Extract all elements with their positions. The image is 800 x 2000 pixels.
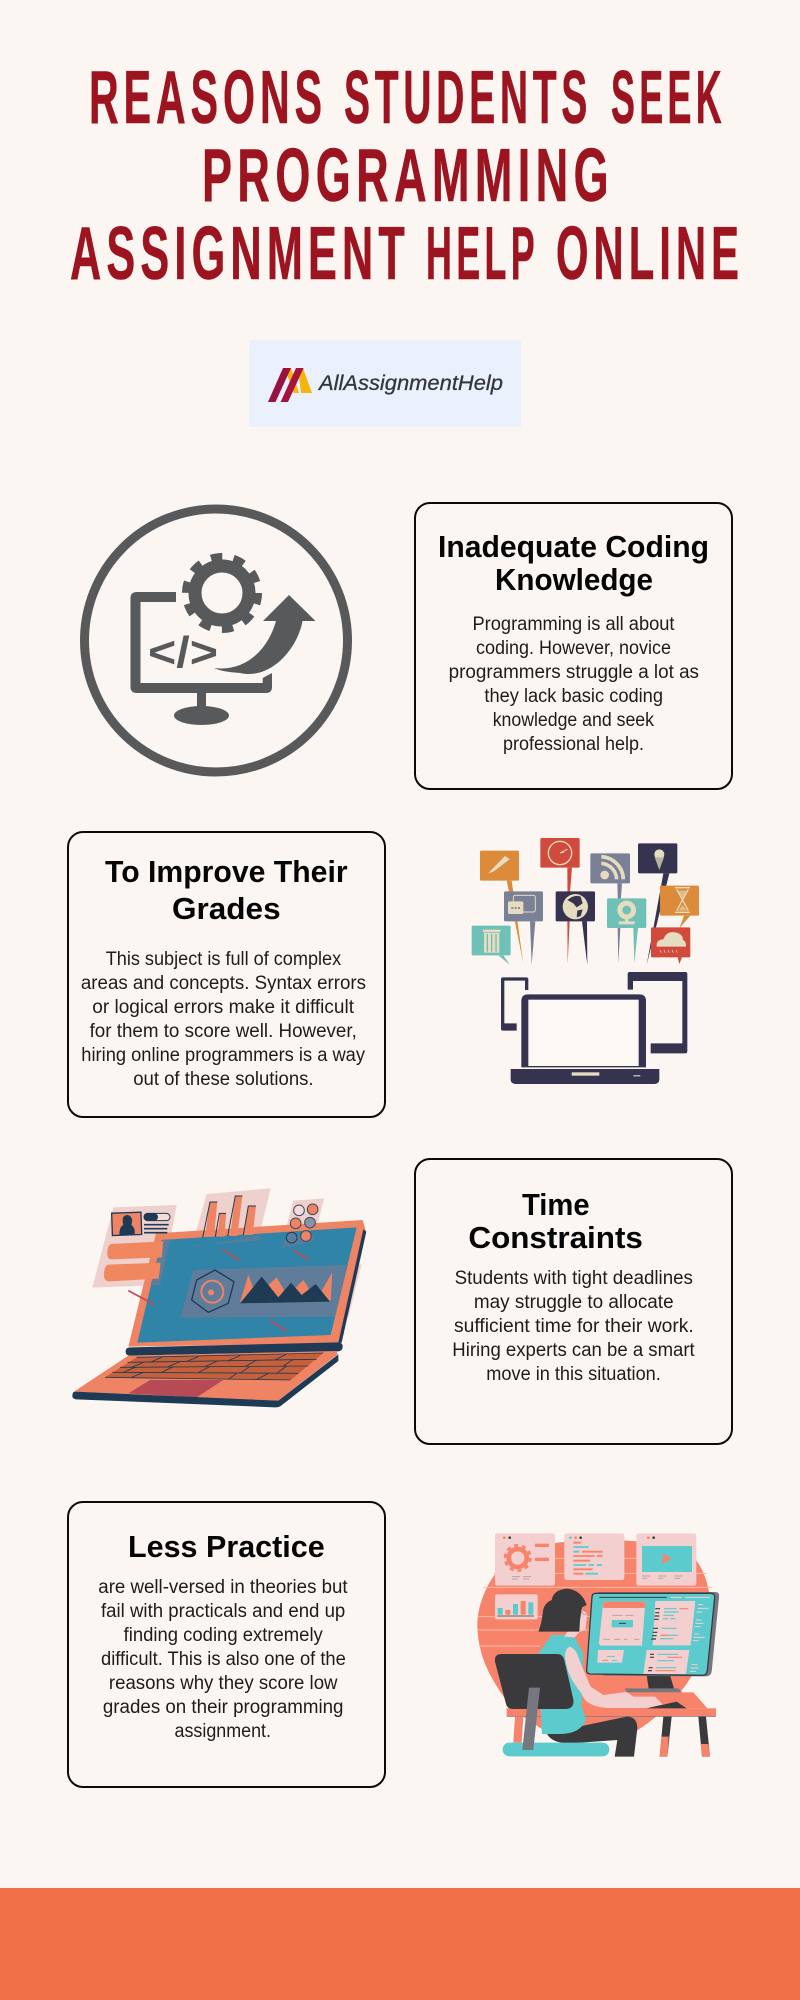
- body text: grades on their programming: [103, 1697, 344, 1718]
- logo: AllAssignmentHelp: [249, 340, 521, 427]
- device: phone: [501, 977, 528, 1031]
- heading: Time: [522, 1187, 590, 1222]
- body text: This subject is full of complex: [106, 949, 342, 970]
- logo: AllAssignmentHelp: AllAssignmentHelp: [317, 372, 503, 395]
- body text: areas and concepts. Syntax errors: [81, 973, 366, 994]
- trackpad: [128, 1380, 223, 1397]
- illustration: laptop with floating panels: [72, 1188, 366, 1407]
- screen mountains chart: [240, 1272, 332, 1303]
- icon ring: [84, 509, 348, 772]
- monitor: [130, 592, 272, 708]
- code symbol: </>: [148, 628, 218, 677]
- card outline: [68, 832, 385, 1117]
- panel: time constraints: [415, 1159, 732, 1444]
- laptop front edge: [72, 1354, 338, 1407]
- body text: knowledge and seek: [493, 710, 654, 731]
- title: ASSIGNMENT: [70, 211, 410, 295]
- body text: [98, 1577, 348, 1742]
- bubble: webcam: [607, 898, 646, 928]
- body text: or logical errors make it difficult: [92, 997, 355, 1018]
- body text: Students with tight deadlines: [455, 1268, 693, 1289]
- panel: less practice: [68, 1502, 385, 1787]
- person torso: [538, 1635, 586, 1734]
- illustration: devices with app bubbles: [472, 838, 699, 1084]
- bubble: hourglass: [660, 886, 699, 916]
- person neck and face: [564, 1607, 587, 1637]
- laptop lid: [128, 1220, 366, 1347]
- window: gear settings: [495, 1533, 555, 1586]
- body text: for them to score well. However,: [90, 1021, 357, 1042]
- heading: [438, 529, 709, 597]
- profile card content: [104, 1212, 170, 1281]
- device: tablet: [628, 972, 687, 1053]
- icon: code monitor with gear and arrow: [84, 509, 348, 772]
- arrow: [214, 595, 316, 674]
- body text: professional help.: [503, 734, 644, 755]
- body text: sufficient time for their work.: [454, 1316, 694, 1337]
- body text: are well-versed in theories but: [98, 1577, 348, 1598]
- heading: [105, 854, 348, 926]
- laptop screen: [137, 1227, 357, 1343]
- body text: [452, 1268, 695, 1385]
- bubble: clock: [540, 838, 580, 868]
- card outline: [415, 503, 732, 789]
- chair base: [503, 1743, 609, 1756]
- window: bar chart: [495, 1594, 538, 1619]
- body text: reasons why they score low: [109, 1673, 338, 1694]
- person hair: [538, 1589, 587, 1632]
- gear: [186, 557, 258, 629]
- panel overlaps on screen: [151, 1235, 347, 1318]
- lid right edge: [338, 1229, 366, 1343]
- monitor base: [174, 706, 229, 725]
- heading: Knowledge: [495, 562, 653, 597]
- dots content: [286, 1204, 318, 1243]
- panel: inadequate coding knowledge: [415, 503, 732, 789]
- floating panels: [92, 1188, 362, 1317]
- body text: Programming is all about: [472, 614, 675, 635]
- chair back: [495, 1654, 573, 1709]
- window: code lines: [564, 1533, 624, 1580]
- bubble: rss: [590, 853, 630, 883]
- laptop deck: [74, 1351, 338, 1401]
- card outline: [415, 1159, 732, 1444]
- heading: Grades: [172, 891, 281, 926]
- window: video player: [636, 1533, 696, 1586]
- body text: [81, 949, 366, 1090]
- heading: To Improve Their: [105, 854, 348, 889]
- title: REASONS: [89, 55, 327, 139]
- body text: fail with practicals and end up: [101, 1601, 345, 1622]
- body text: finding coding extremely: [124, 1625, 323, 1646]
- bubble: trash can: [472, 926, 511, 955]
- blob stripes: [478, 1558, 712, 1646]
- footer band: [0, 1888, 800, 2000]
- heading: Constraints: [468, 1220, 643, 1255]
- bubble stems: [498, 868, 690, 965]
- panel: to improve their grades: [68, 832, 385, 1117]
- chair post: [522, 1688, 540, 1750]
- glasses: [582, 1610, 587, 1615]
- body text: coding. However, novice: [476, 638, 671, 659]
- laptop hinge: [126, 1342, 343, 1356]
- body text: difficult. This is also one of the: [101, 1649, 346, 1670]
- heading: [468, 1187, 643, 1255]
- monitor: [587, 1592, 719, 1692]
- body text: assignment.: [174, 1721, 271, 1742]
- desk: [507, 1692, 716, 1757]
- person legs: [547, 1717, 637, 1757]
- bar chart content: [203, 1196, 256, 1238]
- title: [70, 55, 744, 295]
- device: laptop: [511, 994, 659, 1084]
- keyboard: [647, 1702, 687, 1708]
- bubble: pencil: [480, 851, 519, 881]
- bubble: chat: [504, 891, 543, 921]
- bubble: globe: [556, 891, 595, 921]
- bubble: rain cloud: [651, 927, 690, 957]
- body text: programmers struggle a lot as: [449, 662, 699, 683]
- card outline: [68, 1502, 385, 1787]
- title: HELP: [426, 211, 539, 295]
- salmon blob: [477, 1540, 711, 1737]
- person arm: [565, 1647, 663, 1708]
- body text: [449, 614, 699, 755]
- body text: hiring online programmers is a way: [81, 1045, 365, 1066]
- bubble: ice cream: [638, 843, 677, 873]
- heading: Inadequate Coding: [438, 529, 709, 564]
- body text: Hiring experts can be a smart: [452, 1340, 695, 1361]
- red connector ticks: [128, 1249, 308, 1332]
- illustration: programmer at desk: [477, 1533, 719, 1757]
- body text: they lack basic coding: [484, 686, 663, 707]
- heading: Less Practice: [128, 1529, 325, 1564]
- screen hexagon icon: [192, 1270, 234, 1312]
- body text: move in this situation.: [486, 1364, 661, 1385]
- body text: may struggle to allocate: [474, 1292, 674, 1313]
- body text: out of these solutions.: [133, 1069, 314, 1090]
- keyboard: [105, 1353, 323, 1380]
